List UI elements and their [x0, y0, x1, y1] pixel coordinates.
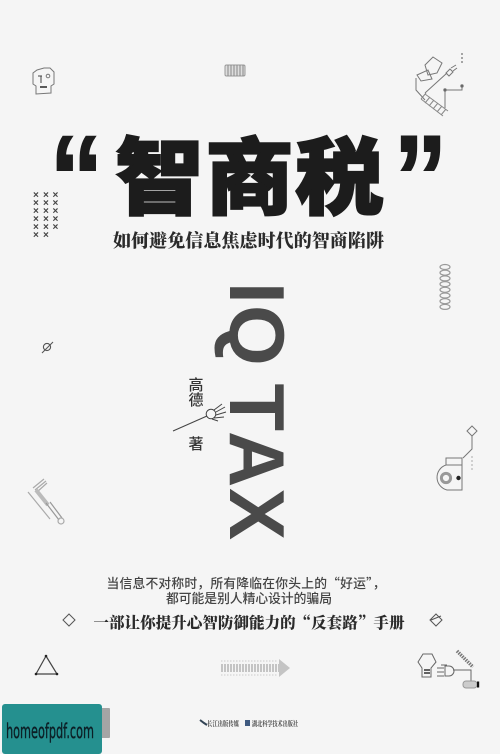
icon: dot x grid — [33, 190, 58, 241]
title closing quote: ” — [393, 110, 448, 246]
icon: ribbed capsule — [225, 65, 245, 76]
tagline: 都可能是别人精心设计的骗局 — [166, 588, 332, 607]
title opening quote: “ — [49, 110, 104, 246]
icon: dot x grid: ××× — [33, 206, 58, 217]
icon: slashed circle — [42, 342, 53, 353]
icon: dot x grid: ××× — [33, 222, 58, 233]
icon: head with stairs and circuit — [416, 53, 463, 116]
icon: chain of links — [440, 264, 450, 309]
publisher: Changjiang: 长江出版传媒 — [207, 719, 239, 729]
icon: bulb head circuit — [418, 651, 479, 688]
tagline — [106, 573, 386, 607]
icon: dot x grid: ×× — [33, 230, 49, 241]
watermark badge: homeofpdf.com — [6, 719, 94, 743]
publisher: Hubei Science: 湖北科学技术出版社 — [252, 719, 298, 729]
tagline: 当信息不对称时，所有降临在你头上的“好运”， — [106, 573, 386, 592]
author name: 著 — [188, 433, 204, 454]
icon: dot x grid: ××× — [33, 198, 58, 209]
icon: robot skull head — [33, 68, 54, 94]
subtitle: 如何避免信息焦虑时代的智商陷阱 — [113, 227, 384, 253]
icon: right diamond — [430, 614, 442, 626]
icon: hand holding a line — [173, 404, 226, 431]
vertical English title IQ TAX: IQTAX — [213, 282, 301, 540]
icon: dot x grid: ××× — [33, 190, 58, 201]
icon: dotted arrow — [221, 659, 290, 677]
author name: 高 — [188, 374, 204, 395]
watermark badge — [2, 704, 102, 754]
icon: dot x grid: ××× — [33, 214, 58, 225]
icon: left diamond — [63, 614, 75, 626]
author name: 德 — [188, 389, 204, 410]
subheading: 一部让你提升心智防御能力的“反套路”手册 — [94, 611, 405, 633]
author name — [188, 374, 204, 454]
title: 智商税 — [115, 110, 384, 232]
icon: spanner tool — [28, 479, 64, 524]
icon: triangle with dots — [35, 655, 58, 675]
watermark tab — [100, 708, 110, 738]
publisher logos — [200, 719, 298, 729]
icon: blower fan with diamond — [437, 426, 477, 490]
